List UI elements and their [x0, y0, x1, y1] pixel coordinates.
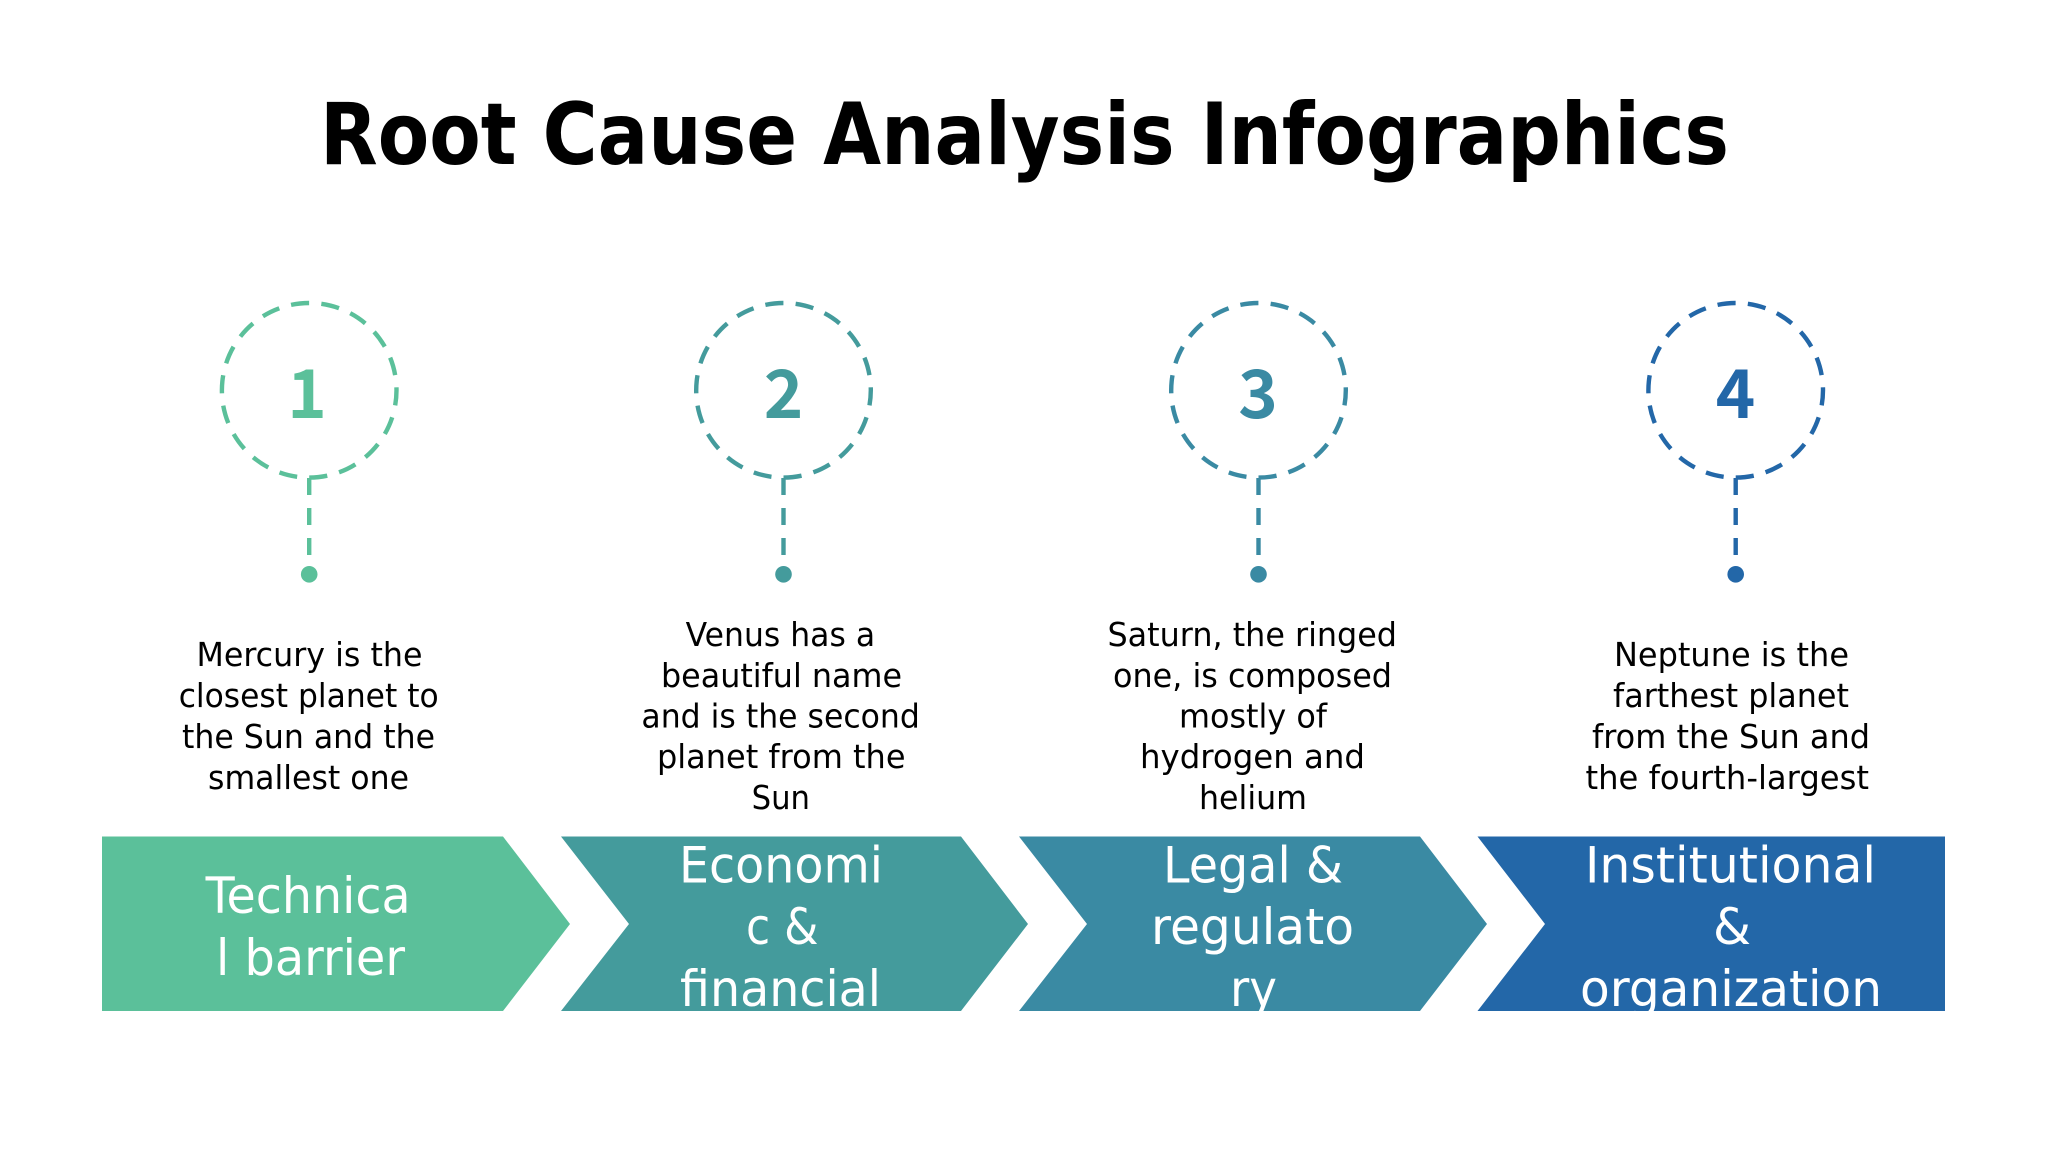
panel: step 1 — [102, 303, 570, 1011]
description 1 — [179, 635, 439, 797]
chevron: Legal & regulatory: ry — [1230, 960, 1277, 1018]
description 3 — [1108, 615, 1397, 817]
chevron: Technical barrier — [102, 836, 570, 1011]
description 1: the Sun and the — [182, 717, 435, 756]
connector dot 3 — [1250, 566, 1267, 583]
chevron: Institutional & organization: organization — [1580, 960, 1882, 1018]
description 1: Mercury is the — [196, 635, 422, 674]
description 3: helium — [1199, 778, 1307, 817]
chevron: Institutional & organization: Institutional — [1585, 837, 1876, 895]
chevron: Legal & regulatory: regulato — [1151, 898, 1354, 956]
description 1: smallest one — [208, 758, 409, 797]
connector dot 2 — [775, 566, 792, 583]
number 1: 1 — [287, 341, 327, 438]
description 2: and is the second — [641, 696, 920, 736]
description 4: from the Sun and — [1592, 717, 1870, 756]
icon: dashed number circle 2 — [696, 303, 871, 556]
description 4: the fourth-largest — [1586, 758, 1869, 797]
panel: step 2 — [561, 303, 1028, 1018]
description 4 — [1586, 635, 1870, 797]
chevron: Economic & financial: c & — [746, 898, 818, 956]
chevron: Economic & financial: financial — [680, 960, 881, 1018]
panel: step 3 — [1019, 303, 1487, 1018]
number 4: 4 — [1716, 341, 1755, 438]
chevron: Institutional & organization: & — [1713, 898, 1751, 956]
icon: dashed number circle 1 — [222, 303, 397, 556]
description 3: hydrogen and — [1140, 737, 1365, 776]
description 2: Venus has a — [686, 615, 875, 654]
description 2: beautiful name — [661, 656, 902, 695]
description 2: planet from the — [657, 737, 906, 776]
description 4: farthest planet — [1613, 676, 1849, 715]
chevron: Technical barrier: l barrier — [216, 929, 405, 987]
icon: dashed number circle 3 — [1171, 303, 1346, 556]
description 3: one, is composed — [1113, 656, 1392, 695]
icon: dashed number circle 4 — [1648, 303, 1823, 556]
chevron: Legal & regulatory: Legal & — [1163, 837, 1343, 895]
description 3: mostly of — [1179, 696, 1328, 736]
description 1: closest planet to — [179, 676, 439, 715]
description 4: Neptune is the — [1614, 635, 1849, 674]
chevron: Economic & financial — [561, 836, 1028, 1018]
chevron: Economic & financial: Economi — [679, 837, 883, 895]
panel: step 4 — [1478, 303, 1945, 1018]
description 2: Sun — [752, 778, 810, 817]
connector dot 1 — [301, 566, 318, 583]
chevron: Legal & regulatory — [1019, 836, 1487, 1018]
title: Root Cause Analysis Infographics — [320, 85, 1729, 185]
description 2 — [641, 615, 920, 817]
chevron: Technical barrier: Technica — [205, 867, 411, 925]
number 2: 2 — [764, 341, 803, 438]
connector dot 4 — [1727, 566, 1744, 583]
number 3: 3 — [1238, 341, 1278, 438]
chevron: Institutional & organization — [1478, 836, 1945, 1018]
description 3: Saturn, the ringed — [1108, 615, 1397, 654]
